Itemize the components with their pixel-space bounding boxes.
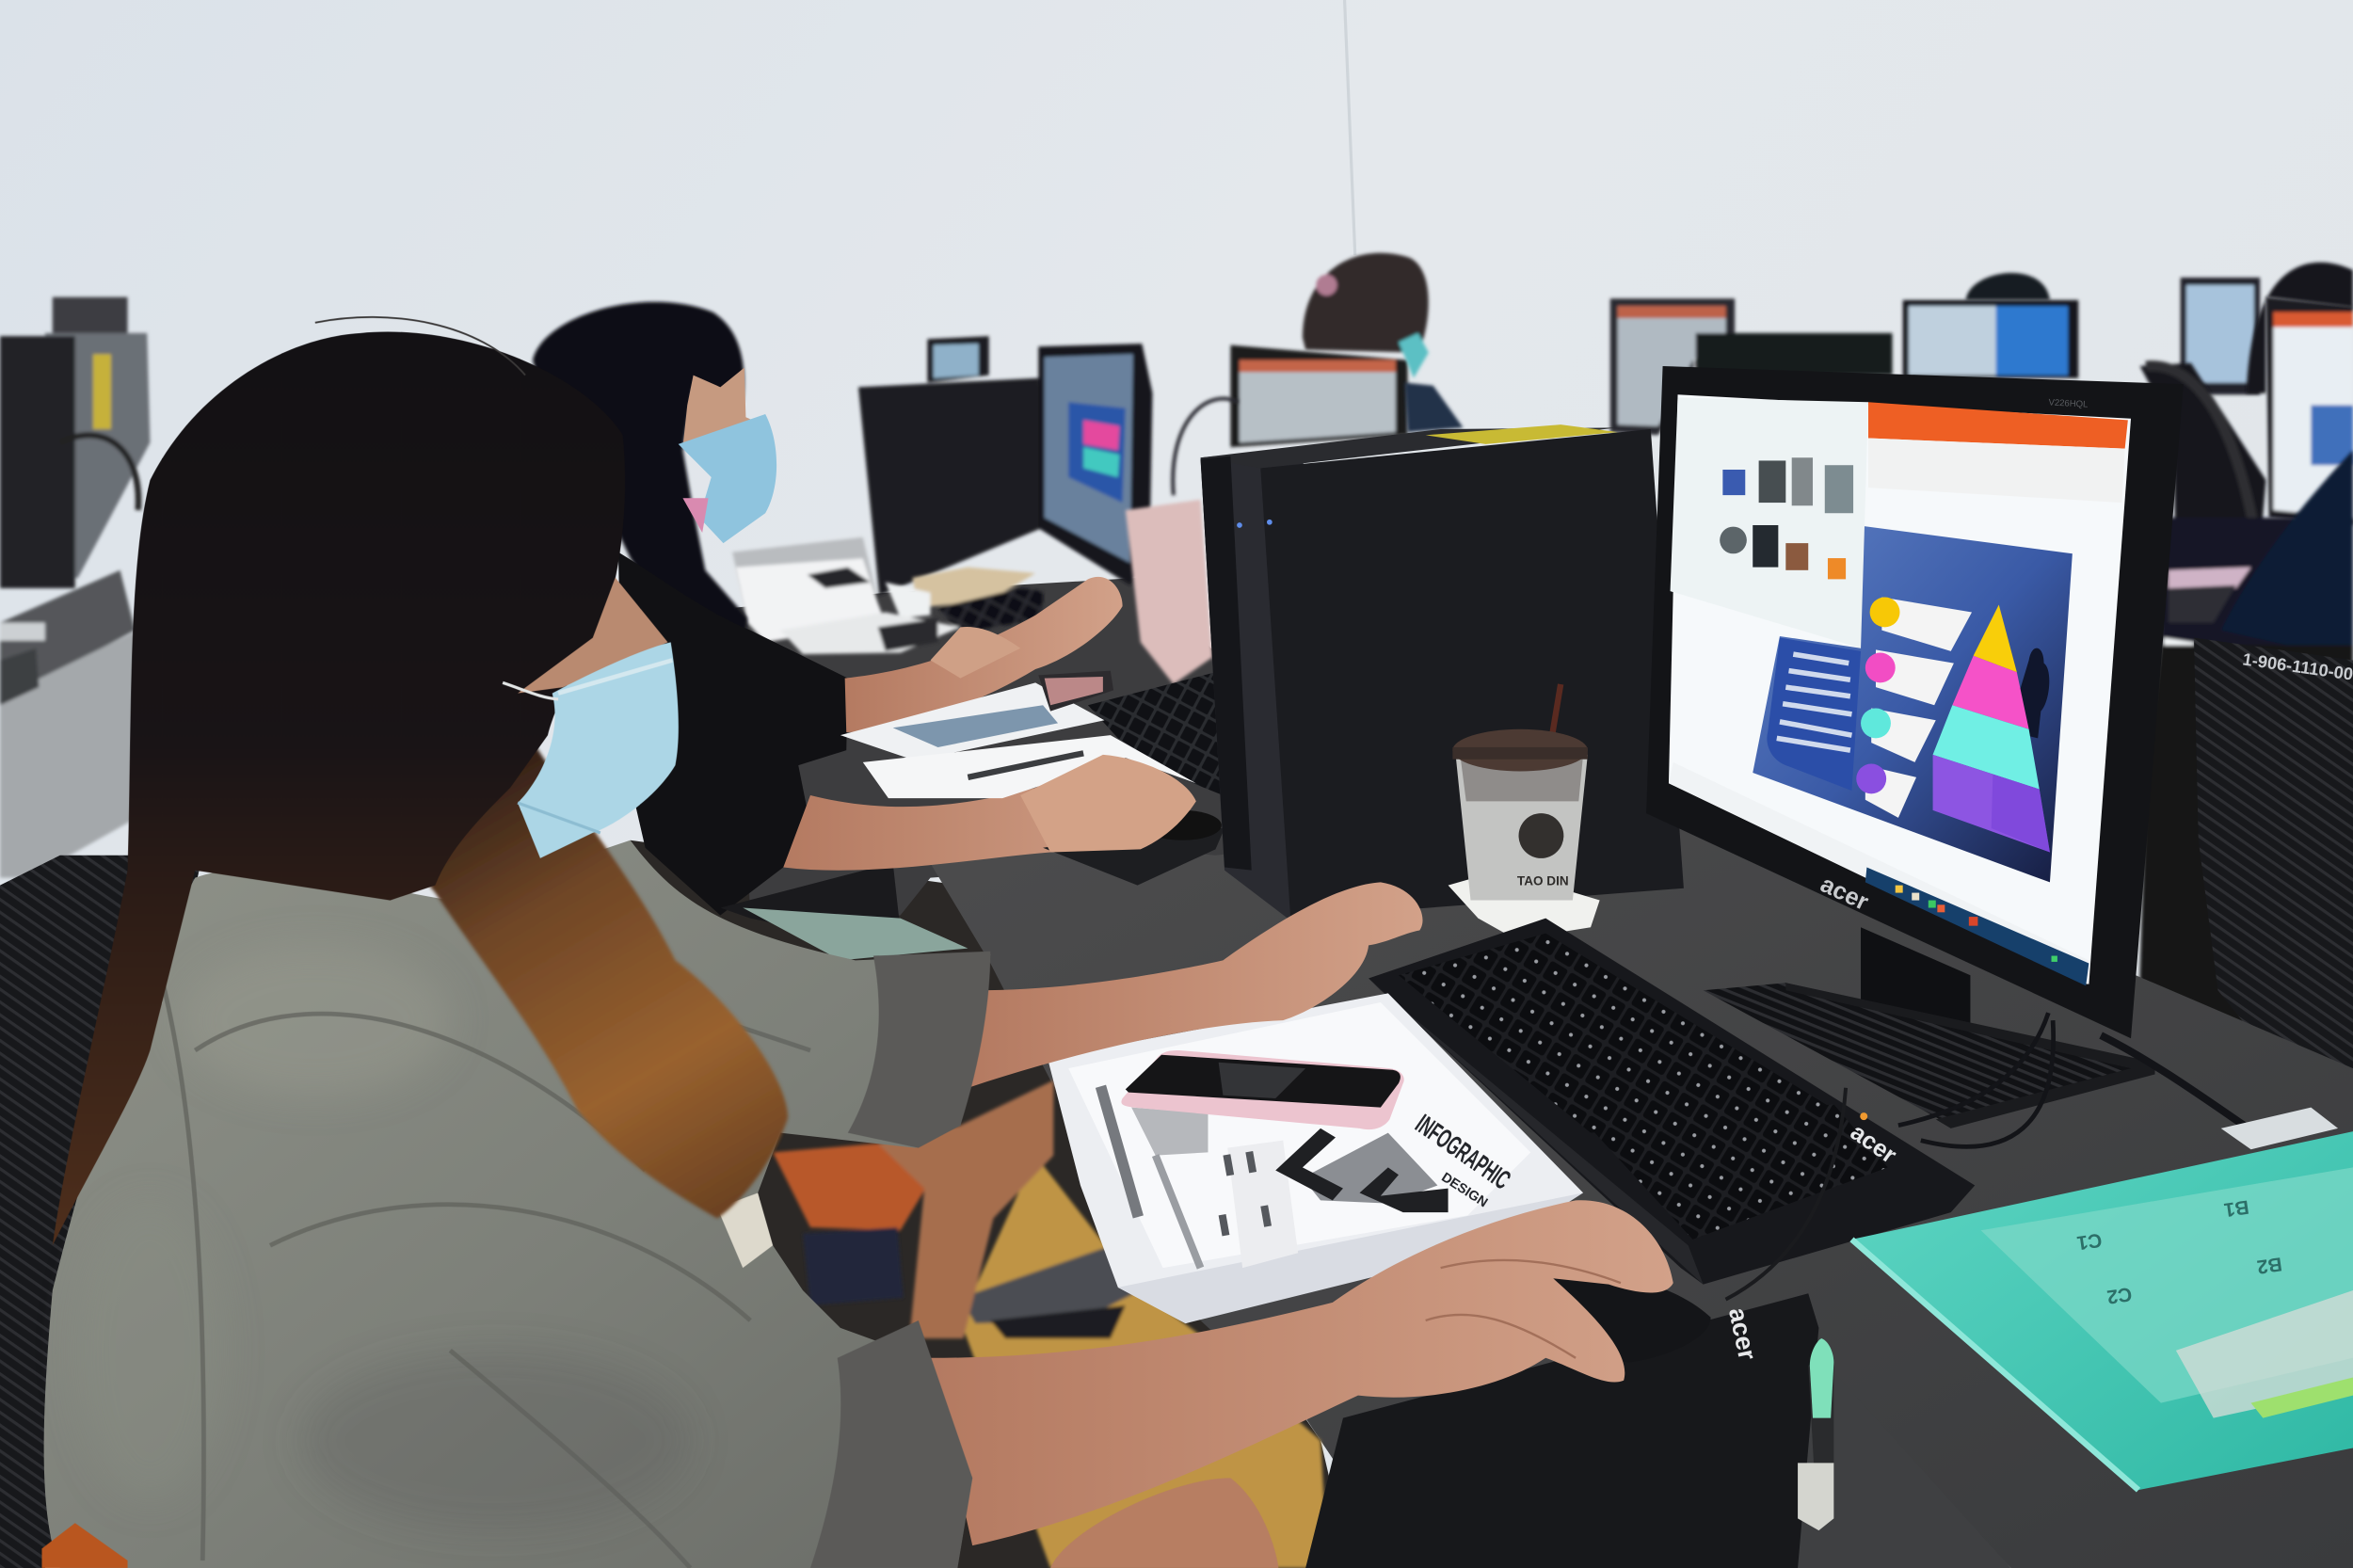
slide: left text panel	[1767, 638, 1861, 791]
PowerPoint title bar	[1868, 402, 2128, 449]
stray hair strands	[315, 317, 525, 376]
office chair right	[2194, 638, 2353, 1088]
jacket folds	[157, 960, 810, 1568]
tissue under cup	[1449, 871, 1600, 939]
upper arm and hand	[968, 882, 1423, 1088]
handout bars	[1096, 1085, 1144, 1219]
folder labels: C2	[2105, 1283, 2134, 1307]
slide: photo background	[1753, 525, 2073, 882]
mouse pad brand: acer	[1723, 1305, 1763, 1363]
knee bottom	[1050, 1478, 1278, 1568]
bezel	[1646, 366, 2184, 1038]
handout title: INFOGRAPHIC	[1410, 1109, 1515, 1195]
handout subtitle: DESIGN	[1438, 1170, 1490, 1210]
main keyboard	[1369, 919, 1975, 1285]
middle desk clutter	[735, 558, 1043, 654]
forearm hand back	[931, 627, 1020, 679]
main monitor stand	[1704, 927, 2155, 1128]
model label: V226HQL	[2048, 397, 2089, 410]
cup brand: TAO DIN	[1517, 874, 1569, 888]
mask	[679, 414, 776, 543]
rolled sleeve lower	[810, 1320, 972, 1568]
finger separation lines	[1426, 1260, 1621, 1358]
wall seam	[1345, 0, 1355, 255]
monitor: right group	[1610, 298, 1735, 435]
pants / seat	[720, 863, 901, 937]
taskbar	[1669, 762, 2089, 984]
folder labels: C1	[2075, 1229, 2104, 1254]
keyboard brand: acer	[1846, 1119, 1901, 1169]
hair main	[53, 331, 625, 1245]
foreground woman	[42, 317, 1673, 1568]
PC tower	[1201, 424, 1684, 919]
pyramid	[1974, 604, 2017, 672]
pen	[1798, 1338, 1833, 1530]
floor and orange chair under desk	[773, 1080, 1328, 1568]
middle desk surface	[735, 578, 1227, 915]
chair tag number: 1-906-1110-00	[2241, 648, 2353, 684]
lower arm	[783, 755, 1196, 871]
person silhouette on slide	[2020, 648, 2049, 738]
folder labels: B1	[2222, 1195, 2250, 1221]
hair	[533, 302, 747, 690]
list tabs	[1881, 598, 1972, 651]
pink handbag	[1126, 399, 1238, 684]
middle desk keyboard and papers	[840, 671, 1225, 886]
main desk surface	[927, 810, 2353, 1568]
black shirt	[618, 552, 848, 915]
back row desk	[732, 537, 878, 631]
slide text	[1777, 654, 1851, 750]
lower leg	[878, 1080, 1053, 1338]
monitor: far small	[927, 336, 989, 383]
left equipment rack and desk	[0, 297, 150, 878]
face	[682, 368, 760, 447]
dialog thumbnails	[1720, 457, 1853, 579]
shirt collar	[717, 1192, 773, 1268]
office chair left	[0, 856, 202, 1568]
monitor cables	[1898, 1013, 2266, 1146]
straw	[1552, 684, 1561, 738]
underlay: floor and shadow under the desks	[631, 840, 1351, 1568]
background heads	[1966, 263, 2353, 393]
mouse pad	[1305, 1293, 1818, 1568]
taskbar icons	[1896, 886, 2057, 962]
lower hand on mouse, forearm	[931, 1200, 1673, 1545]
jacket body	[44, 840, 990, 1568]
monitor: back black case	[858, 378, 1042, 596]
screen	[1669, 394, 2131, 984]
jacket light and shadow patches	[75, 945, 690, 1530]
woman at back	[1303, 253, 1464, 432]
brown wavy hair end	[408, 705, 788, 1219]
phone on papers	[1121, 1050, 1404, 1129]
monitor brand: acer	[1817, 871, 1872, 916]
background monitors	[858, 278, 2353, 596]
folder labels: B2	[2256, 1253, 2283, 1278]
cup logo	[1519, 813, 1563, 858]
cup body	[1456, 755, 1588, 901]
ribbon	[1868, 439, 2125, 503]
monitor: back centre	[1230, 345, 1408, 447]
right side dark bag and person	[2138, 363, 2353, 1080]
woman in the middle	[533, 302, 1196, 960]
main monitor	[1646, 366, 2184, 1038]
file dialog	[1671, 397, 1868, 648]
handout bullets	[1219, 1151, 1272, 1236]
coffee cup	[1449, 684, 1600, 939]
mouse	[1530, 1272, 1711, 1363]
surgical mask	[518, 642, 679, 858]
rolled sleeve upper	[848, 952, 990, 1148]
monitor: with slide	[1038, 344, 1152, 585]
upper arm	[845, 577, 1123, 732]
folder labels	[2075, 1195, 2283, 1307]
face	[518, 578, 668, 694]
stack of papers with infographic handout	[1048, 993, 1583, 1323]
orange accessory bottom	[42, 1523, 128, 1568]
small white item on desk right	[2221, 1108, 2338, 1149]
teal plastic folder	[1851, 1131, 2353, 1490]
handout image	[1303, 1133, 1437, 1204]
cup lid	[1452, 729, 1588, 771]
keyboard cable	[1726, 1088, 1846, 1300]
